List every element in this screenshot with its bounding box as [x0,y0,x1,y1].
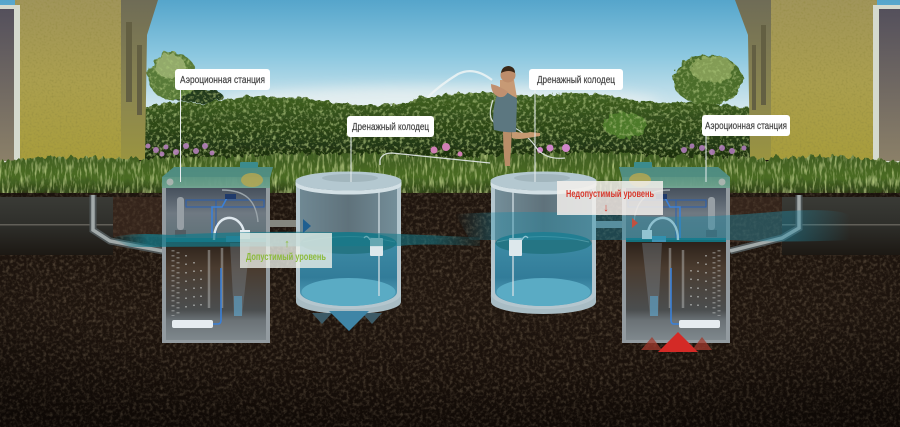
water level band: right [455,210,850,242]
hose behind gardener [490,100,565,158]
gardener figure [491,66,540,166]
flowers: center left [430,143,462,156]
callout line: right well [534,89,536,182]
building: right [735,0,900,165]
label: right aeration station [702,115,790,136]
garden hose [380,153,490,165]
label: left aeration station [175,69,270,90]
soil [0,193,900,427]
drainage well: right [490,172,596,314]
flowers: left [146,143,214,156]
label: right aeration station: Аэроционная станция [705,121,787,132]
arrow: left well outflow [303,219,311,233]
callout: unacceptable level: Недопустимый уровень [566,188,654,200]
flowers: center right [537,144,570,153]
label: left aeration station: Аэроционная станция [180,75,265,86]
label: right drainage well: Дренажный колодец [537,75,615,86]
label: left drainage well [347,116,434,137]
tree: right [673,55,743,108]
label: left drainage well: Дренажный колодец [352,122,429,133]
soil band: upper brown near right tank [730,197,782,242]
drainage well: left [296,172,402,314]
distant horizon haze [220,86,660,118]
overflow pipe: right [596,221,628,228]
callout: acceptable level [240,233,332,268]
aeration station: left [162,162,273,343]
callout line: left station [180,89,182,182]
callout: acceptable level: Допустимый уровень [246,251,326,263]
drain pipe: left [93,195,163,251]
callout line: right station [705,135,707,182]
overflow pipe: left [263,220,297,227]
sky background [0,0,900,112]
callout: unacceptable level: ↓ [603,202,609,214]
water level band: left [110,232,490,247]
drain pipe: right [730,195,799,251]
grass strip [0,153,900,197]
soil band: upper brown near tanks [113,197,162,237]
label: right drainage well [529,69,623,90]
percolation arrows: left well [312,311,382,331]
callout: unacceptable level [557,181,663,215]
shrub: right of centre [603,112,647,138]
tree: left [148,52,223,103]
hedge [143,92,750,165]
arrow: right well blocked [632,218,638,228]
callout line: left well [350,136,352,182]
basement wall: left [0,197,113,255]
pressure arrows: right station [641,332,712,352]
building: left [0,0,158,165]
aeration station: right [619,162,730,343]
water jet from hose [428,71,492,97]
flowers: right [681,144,746,155]
basement wall: right [782,197,900,255]
callout: acceptable level: ↑ [284,238,290,250]
